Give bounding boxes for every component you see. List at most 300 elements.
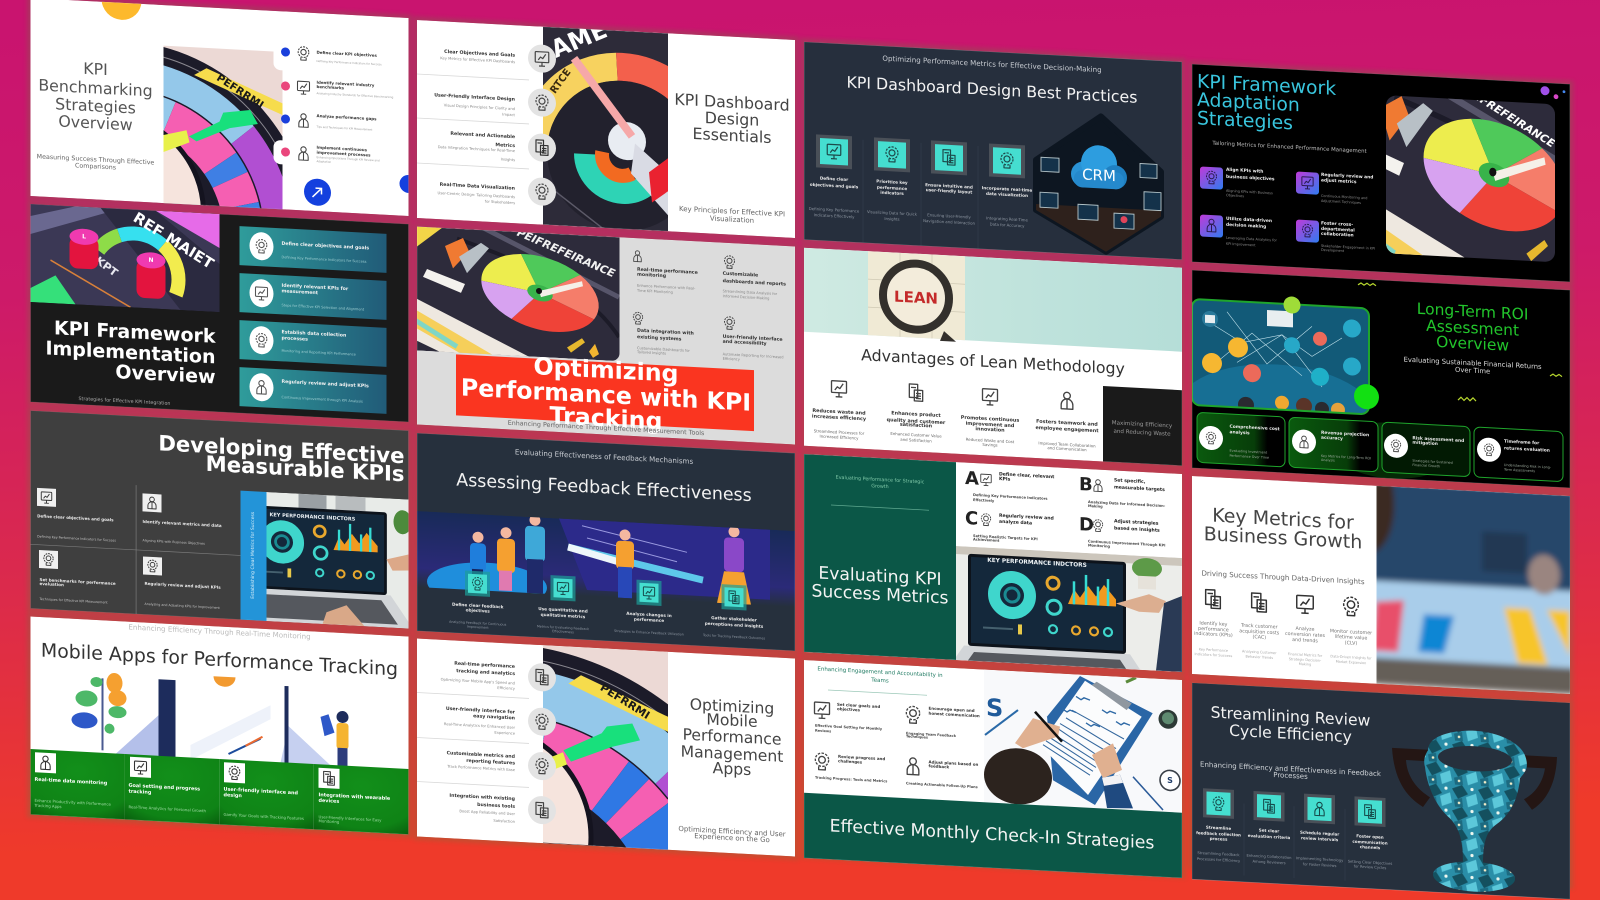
item: Identify relevant industry benchmarks: Analyzing Industry Standards for Effective Benchmarking — [316, 91, 394, 99]
item: Align KPIs with business objectives — [1200, 166, 1274, 198]
title: Measurable KPIs — [206, 451, 404, 487]
item: User-friendly interface and design: Gamify Your Goals with Tracking Features — [224, 812, 304, 821]
item: Promotes continuous improvement and innovation: Savings — [982, 441, 998, 447]
item: Prioritize key performance indicators: Insights — [884, 215, 900, 221]
item: Use quantitative and qualitative metrics: Effectiveness — [552, 629, 574, 634]
item: Data integration with existing systems: existing systems — [637, 334, 682, 342]
card: Risk assessment and mitigation: Strategies for Sustained — [1412, 459, 1453, 465]
item: Analyze conversion rates and trends: Making — [1299, 662, 1311, 667]
title: Tracking — [550, 401, 662, 435]
subtitle: Measuring Success Through Effective — [37, 153, 154, 166]
item: Utilize data-driven decision making: decision making — [1226, 221, 1266, 229]
item: Set clear evaluation criteria — [1246, 791, 1292, 866]
item: Streamline feedback collection process: process — [1210, 835, 1228, 841]
title: Assessment — [1426, 317, 1519, 340]
image: CRM cloud: CRM — [1082, 165, 1116, 185]
item: Implement continuous improvement processes: Implement continuous — [316, 144, 368, 152]
title: Success Metrics — [811, 581, 949, 609]
item: Use quantitative and qualitative metrics: Metrics for Evaluating Feedback — [537, 624, 589, 631]
item: Goal setting and progress tracking: tracking — [128, 789, 152, 796]
item: Ensure intuitive and user-friendly layout — [923, 140, 975, 225]
item: Real-time performance monitoring: Time KPI Monitoring — [636, 289, 673, 295]
item: Set clear goals and objectives — [814, 700, 883, 736]
image: laptop dashboard — [938, 545, 1182, 695]
item: Analyze conversion rates and trends: and trends — [1292, 637, 1318, 644]
item: Define clear feedback objectives: Improvement — [467, 625, 489, 630]
item: Monitor customer lifetime value: Monitor customer — [1330, 628, 1372, 636]
image: performance dial: PEFRRMI — [598, 681, 652, 722]
title: Apps — [713, 759, 751, 779]
subtitle: Optimizing Efficiency and User — [678, 825, 786, 839]
item: Gather stakeholder perceptions and insights: Tools for Tracking Feedback Outcomes — [702, 633, 765, 640]
item: Identify key performance indicators: Identify key — [1199, 620, 1228, 627]
item: Foster open communication channels — [1348, 796, 1392, 871]
item: Encourage open and honest communication: Engaging Team Feedback — [906, 731, 957, 738]
item: Implement continuous improvement processes: Enhancing Operations Through KPI Review and — [316, 155, 380, 163]
item: User-Friendly Interface Design: User-Friendly Interface Design — [434, 92, 515, 103]
item: Gather stakeholder perceptions and insights: perceptions and insights — [705, 620, 764, 628]
card: Define clear objectives and goals: Defining Key Performance Indicators for Success — [282, 255, 367, 264]
item: Set clear evaluation criteria: Enhancing Collaboration — [1246, 854, 1292, 860]
item: Analyze conversion rates and trends: Analyze — [1296, 625, 1314, 632]
item: Identify relevant metrics and data — [142, 493, 222, 547]
item: Identify relevant metrics and data: Aligning KPIs with Business Objectives — [142, 538, 205, 546]
subtitle: Visualization — [710, 215, 754, 225]
image: laptop dashboard: KEY PERFORMANCE INDCTORS — [987, 558, 1087, 569]
card: Comprehensive cost analysis: Comprehensive cost — [1230, 423, 1280, 432]
item: Foster cross-departmental collaboration: Foster cross- — [1321, 220, 1353, 228]
title: Benchmarking — [38, 75, 153, 100]
item: Track customer acquisition costs: Behavior Trends — [1246, 655, 1273, 660]
item: Enhances product quality and customer satisfaction: quality and customer — [887, 417, 946, 426]
item: Foster open communication channels: for Review Cycles — [1354, 864, 1386, 870]
image: signing a checklist: S — [986, 694, 1003, 723]
subtitle: Teams — [870, 678, 889, 684]
item: Adjust plans based on feedback: feedback — [928, 763, 949, 769]
item: Reduces waste and increases efficiency — [812, 380, 867, 441]
item: Ensure intuitive and user-friendly layout: Ensure intuitive and — [925, 182, 973, 189]
item A: KPIs — [999, 476, 1011, 482]
item: Encourage open and honest communication: Encourage open and — [928, 705, 975, 713]
image: KPI gauge with cylinders: N — [148, 257, 154, 264]
item: Analyze performance gaps — [281, 113, 376, 131]
item: Define clear objectives and goals — [809, 134, 860, 219]
item: Incorporate real-time data visualization — [982, 143, 1032, 228]
image: LEAN magnifier — [804, 248, 1182, 354]
item: Set clear evaluation criteria: Set clear — [1259, 827, 1279, 833]
item: Real-time performance monitoring — [634, 251, 698, 296]
item: Reduces waste and increases efficiency: Increased Efficiency — [820, 433, 859, 440]
item B: Analyzing Data for Informed Decision- — [1088, 500, 1166, 508]
item: Relevant and Actionable Metrics: Insights — [501, 157, 515, 162]
item: Ensure intuitive and user-friendly layout: Ensuring User-Friendly — [927, 212, 972, 219]
item: User-friendly interface and design: User-friendly interface and — [224, 787, 299, 797]
item: Regularly review and adjust metrics: adjust metrics — [1321, 177, 1357, 185]
item: Adjust plans based on feedback — [906, 758, 979, 789]
item: Goal setting and progress tracking — [125, 754, 219, 825]
sidebar — [804, 454, 956, 660]
item: Incorporate real-time data visualization: data visualization — [986, 190, 1028, 198]
list background tabs — [274, 52, 282, 164]
item: Promotes continuous improvement and innovation: Reduced Waste and Cost — [966, 436, 1015, 444]
item: Streamline feedback collection process: Streamline — [1206, 824, 1231, 830]
title banner — [456, 354, 754, 431]
item: Prioritize key performance indicators: Prioritize key — [876, 178, 908, 185]
item: Integration with wearable devices: User-Friendly Interfaces for Easy — [318, 814, 382, 822]
item: Align KPIs with business objectives: Align KPIs with — [1226, 166, 1263, 174]
item: Customizable metrics and reporting features: Customizable metrics and — [447, 750, 515, 759]
subtitle: Key Principles for Effective KPI — [679, 205, 785, 219]
callout box: and Reducing Waste — [1113, 429, 1171, 438]
title: Strategies — [55, 94, 136, 117]
illustration: plant, charts and person — [72, 669, 348, 769]
item: Identify key performance indicators: indicators (KPIs) — [1194, 630, 1233, 638]
vertical label bar — [240, 491, 266, 621]
item: User-friendly interface and accessibility: Efficiency — [723, 357, 741, 362]
panel: KPI Benchmarking Strategies Overview — [30, 0, 408, 216]
panel: KPI Framework Implementation Overview — [30, 203, 408, 422]
title: Adaptation — [1197, 89, 1300, 116]
item: Analyze changes in performance: Strategies to Enhance Feedback Utilization — [614, 629, 684, 637]
item: Integration with wearable devices: Integration with wearable — [318, 792, 391, 802]
image: LEAN magnifier: LEAN — [894, 287, 938, 308]
item: Schedule regular review intervals — [1296, 793, 1344, 868]
item: Integration with existing business tools: business tools — [477, 801, 515, 809]
item: Identify relevant metrics and data: Identify relevant metrics and data — [142, 519, 222, 528]
item: Goal setting and progress tracking: Real-Time Analytics for Personal Growth — [128, 804, 207, 813]
item: Integration with existing business tools: Integration with existing — [449, 792, 515, 802]
subtitle: Experience on the Go — [694, 832, 770, 844]
subtitle: Strategies for Effective KPI Integration — [79, 396, 170, 407]
item: Define clear objectives and goals: Indicators Effectively — [814, 212, 855, 219]
item: Identify relevant industry benchmarks: Identify relevant industry — [316, 79, 375, 87]
image: crystal trophy — [1392, 726, 1557, 896]
item: Data integration with existing systems: Data integration with — [637, 327, 694, 336]
item: Review progress and challenges: challenges — [838, 758, 863, 764]
item: Define clear objectives and goals — [37, 488, 116, 543]
item: Prioritize key performance indicators: performance — [877, 184, 907, 191]
card: Risk assessment and mitigation: Financial Growth — [1412, 463, 1440, 468]
item: Review progress and challenges — [815, 752, 887, 783]
panel: Advantages of Lean Methodology — [804, 248, 1182, 466]
title: Performance with KPI — [461, 373, 751, 417]
item B: Set specific, — [1114, 477, 1146, 485]
item D: D — [1079, 514, 1094, 536]
item: Fosters teamwork and employee engagement: Fosters teamwork and — [1036, 419, 1098, 428]
item: Ensure intuitive and user-friendly layout: user-friendly layout — [926, 187, 972, 194]
item: Real-Time Data Visualization: User-Centric Design: Tailoring Dashboards — [438, 191, 515, 199]
item: Promotes continuous improvement and innovation: Promotes continuous — [961, 415, 1019, 424]
item: Regularly review and adjust metrics: Adjustment Techniques — [1321, 199, 1361, 205]
card: Comprehensive cost analysis: Performance Over Time — [1230, 454, 1269, 460]
item: Set clear goals and objectives: Set clear goals and — [837, 701, 880, 709]
item: Fosters teamwork and employee engagement: and Communication — [1047, 445, 1087, 452]
item: Enhances product quality and customer satisfaction: satisfaction — [900, 422, 933, 430]
item: Promotes continuous improvement and innovation — [961, 388, 1019, 448]
icon: arrow button — [304, 178, 331, 206]
item: Use quantitative and qualitative metrics: qualitative metrics — [541, 611, 586, 619]
item: User-Friendly Interface Design: Impact — [502, 113, 516, 117]
card: Regularly review and adjust KPIs: Continuous Improvement through KPI Analysis — [282, 395, 363, 404]
title: KPI Dashboard — [674, 89, 790, 114]
item: Encourage open and honest communication — [906, 704, 980, 742]
item: Enhances product quality and customer satisfaction — [887, 383, 946, 444]
item: Foster open communication channels: Setting Clear Objectives — [1348, 860, 1392, 866]
card: Define clear objectives and goals: Define clear objectives and goals — [282, 241, 369, 251]
item: Foster open communication channels: communication — [1352, 838, 1388, 845]
item: User-friendly interface for easy navigation — [444, 703, 556, 738]
item: Real-time data monitoring: Tracking Apps — [34, 802, 62, 809]
item D: based on insights — [1114, 525, 1160, 533]
card: Risk assessment and mitigation: Risk assessment and — [1412, 435, 1464, 444]
item: Use quantitative and qualitative metrics: Use quantitative and — [538, 606, 588, 613]
title: Cycle Efficiency — [1229, 722, 1352, 746]
item: Analyze changes in performance — [614, 578, 684, 637]
item: Goal setting and progress tracking: Goal setting and progress — [128, 783, 200, 792]
item: Streamline feedback collection process: Processes for Efficiency — [1197, 857, 1241, 863]
item: Schedule regular review intervals: Schedule regular — [1300, 829, 1339, 836]
card: Timeframe for returns evaluation: Understanding Risk in Long- — [1504, 463, 1552, 470]
image: performance gauge: PEIFREFEIRANCE — [1461, 83, 1558, 151]
image: blurred business chart — [1372, 481, 1577, 694]
item: Enhances product quality and customer satisfaction: and Satisfaction — [900, 436, 932, 443]
card: Regularly review and adjust KPIs — [240, 367, 386, 414]
item D: Continuous Improvement Through KPI — [1088, 539, 1165, 548]
item A: Defining Key Performance Indicators — [973, 493, 1048, 501]
subtitle: Driving Success Through Data-Driven Insights — [1201, 569, 1365, 586]
image: performance dial: PEFRRMI — [214, 72, 266, 111]
title: Developing Effective — [158, 431, 404, 469]
item: Track customer acquisition costs: acquisition costs — [1239, 628, 1280, 636]
image: laptop dashboard — [214, 489, 414, 631]
title: Overview — [58, 111, 133, 134]
image: performance gauge — [407, 220, 620, 377]
item: Real-time data monitoring: Enhance Productivity with Performance — [34, 797, 112, 806]
title: KPI Framework — [1197, 71, 1336, 99]
panel: Streamlining Review Cycle Efficiency — [1192, 683, 1570, 899]
item: Implement continuous improvement processes: improvement processes — [316, 149, 371, 157]
item: Analyze conversion rates and trends: Financial Metrics for — [1288, 652, 1323, 658]
image: dashboard gauge — [543, 26, 668, 232]
item: Align KPIs with business objectives: business objectives — [1226, 173, 1275, 182]
item: Customizable dashboards and reports: dashboards and reports — [723, 278, 786, 287]
item: Set clear goals and objectives: Reviews — [815, 729, 831, 733]
item: Define clear objectives and goals: Define clear objectives and goals — [37, 513, 114, 522]
item: Analyze performance gaps: Tips and Techniques for KPI Measurement — [316, 125, 372, 132]
item: Promotes continuous improvement and innovation: improvement and — [966, 421, 1015, 429]
item C: analyze data — [999, 518, 1032, 526]
title: KPI Dashboard Design Best Practices — [847, 72, 1137, 107]
item: Real-time data monitoring: Real-time data monitoring — [34, 777, 108, 787]
card: Identify relevant KPIs for measurement: Steps for Effective KPI Selection and Alignment — [282, 303, 365, 312]
item: User-friendly interface for easy navigation: User-friendly interface for — [446, 705, 516, 715]
item: Reduces waste and increases efficiency: increases efficiency — [812, 414, 867, 422]
item: Incorporate real-time data visualization: Data for Accuracy — [990, 221, 1025, 228]
signing hand and pen — [984, 709, 1133, 810]
item: Implement continuous improvement processes: Adaptation — [316, 159, 331, 164]
item: Reduces waste and increases efficiency: Streamlined Processes for — [814, 428, 865, 435]
item: Relevant and Actionable Metrics — [438, 131, 556, 162]
subtitle: Evaluating Effectiveness of Feedback Mechanisms — [515, 447, 693, 466]
card: Establish data collection processes: Monitoring and Reporting KPI Performance — [282, 349, 356, 357]
image: KPI gauge with cylinders: REF MAIET — [130, 209, 218, 273]
title: Long-Term ROI — [1417, 300, 1528, 324]
card: Establish data collection processes: processes — [282, 335, 308, 342]
item: Relevant and Actionable Metrics: Relevant and Actionable — [450, 130, 515, 140]
item: Align KPIs with business objectives: Objectives — [1226, 193, 1244, 198]
item B — [1079, 474, 1166, 512]
card: Comprehensive cost analysis: Evaluating Investment — [1230, 449, 1268, 455]
title: Implementation — [45, 337, 215, 368]
item: Integration with existing business tools — [449, 791, 556, 826]
item: Analyze conversion rates and trends: conversion rates — [1285, 630, 1325, 639]
item: Adjust plans based on feedback: Creating Actionable Follow-Up Plans — [906, 781, 978, 789]
item: User-friendly interface and design: design — [224, 792, 242, 799]
item: User-friendly interface and accessibility: User-friendly interface — [723, 333, 783, 342]
item: Real-time performance tracking and analytics: tracking and analytics — [456, 668, 515, 677]
title: Performance — [683, 726, 781, 749]
subtitle: Growth — [871, 483, 889, 490]
item: Review progress and challenges: Review progress and — [838, 753, 885, 761]
item: Real-time performance tracking and analytics: Efficiency — [497, 686, 516, 691]
panel: Effective Monthly Check-In Strategies — [804, 660, 1182, 879]
image: CRM cloud — [1036, 113, 1161, 255]
card: Revenue projection accuracy: Analysis — [1321, 458, 1335, 463]
card: Revenue projection accuracy — [1289, 417, 1378, 472]
image: laptop dashboard: KEY PERFORMANCE INDCTORS — [270, 512, 356, 523]
item: Utilize data-driven decision making — [1200, 214, 1278, 249]
image: signing a checklist — [984, 670, 1182, 813]
item: Utilize data-driven decision making: Leveraging Data Analytics for — [1226, 236, 1278, 243]
item: Foster cross-departmental collaboration: departmental — [1321, 225, 1355, 233]
vertical label bar: Establishing Clear Metrics for Success — [250, 511, 256, 599]
item: Integration with wearable devices — [314, 764, 408, 835]
item: Foster open communication channels: channels — [1360, 844, 1381, 850]
item: Set clear goals and objectives: Effective Goal Setting for Monthly — [815, 724, 883, 731]
item: Real-time performance monitoring: Real-time performance — [637, 266, 698, 275]
image: dashboard gauge: RTCE — [548, 67, 574, 96]
image: KPI gauge with cylinders: KPT — [93, 254, 120, 280]
panel: KPI Framework Adaptation Strategies — [1192, 64, 1570, 282]
item: Ensure intuitive and user-friendly layout: Navigation and Interaction — [923, 218, 975, 225]
clipboard — [1040, 674, 1153, 808]
panel: KPI Dashboard Design Best Practices — [804, 42, 1182, 260]
item: Schedule regular review intervals: Implementing Technology — [1296, 856, 1344, 863]
title: Mobile Apps for Performance Tracking — [41, 640, 398, 680]
item: Clear Objectives and Goals: Key Metrics for Effective KPI Dashboards — [440, 56, 515, 64]
item A: Define clear, relevant — [999, 471, 1055, 480]
item: Streamline feedback collection process: Streamlining Feedback — [1197, 851, 1240, 857]
item: Define clear feedback objectives — [449, 570, 507, 631]
image: dashboard gauge: AME — [546, 16, 612, 64]
item: Foster cross-departmental collaboration: Development — [1321, 248, 1345, 253]
image: performance dial — [503, 643, 733, 879]
image: performance gauge: PEIFREFEIRANCE — [515, 226, 617, 280]
title: KPI — [83, 58, 108, 79]
subtitle: Enhancing Efficiency and Effectiveness in Feedback — [1200, 761, 1382, 778]
item: Regularly review and adjust KPIs — [143, 556, 221, 610]
item B: B — [1079, 474, 1093, 496]
item: User-friendly interface for easy navigation: Experience — [494, 731, 516, 736]
image: performance gauge — [1386, 96, 1555, 262]
item: Fosters teamwork and employee engagement: Improved Team Collaboration — [1038, 440, 1096, 448]
title: Streamlining Review — [1211, 703, 1371, 730]
item: Utilize data-driven decision making: Utilize data-driven — [1226, 215, 1272, 224]
item: Align KPIs with business objectives: Aligning KPIs with Business — [1226, 189, 1273, 195]
item C: C — [965, 508, 978, 530]
item: User-friendly interface and accessibility: Automate Reporting for Increased — [723, 352, 784, 359]
item: Define clear KPI objectives — [281, 46, 382, 66]
item: Relevant and Actionable Metrics: Metrics — [495, 142, 515, 149]
callout box: Maximizing Efficiency — [1112, 420, 1173, 430]
item: Customizable dashboards and reports: Informed Decision-Making — [723, 294, 769, 301]
item: Incorporate real-time data visualization: Incorporate real-time — [982, 185, 1032, 192]
subtitle: Enhancing Performance Through Effective Measurement Tools — [508, 420, 704, 437]
item A: A — [965, 468, 979, 490]
item: Customizable metrics and reporting features — [446, 747, 556, 781]
title: Business Growth — [1204, 523, 1362, 554]
title: Optimizing — [690, 695, 774, 718]
item: Real-time performance tracking and analytics: Real-time performance — [454, 660, 515, 669]
item: Real-time performance tracking and analytics: Optimizing Your Mobile App's Speed and — [441, 678, 515, 685]
item: Prioritize key performance indicators: indicators — [880, 189, 904, 196]
item B: Making — [1088, 504, 1103, 509]
item: Clear Objectives and Goals — [440, 44, 556, 73]
card: Identify relevant KPIs for measurement — [240, 273, 386, 320]
image: signing a checklist: S — [1167, 776, 1173, 785]
panel: Long-Term ROI Assessment Overview — [1177, 269, 1570, 488]
image: performance dial — [164, 46, 282, 210]
card: Risk assessment and mitigation: mitigation — [1412, 439, 1438, 447]
item: User-friendly interface and accessibility: and accessibility — [723, 338, 767, 347]
item: Schedule regular review intervals: review intervals — [1301, 835, 1339, 842]
card: Comprehensive cost analysis: analysis — [1230, 429, 1250, 436]
item: User-friendly interface for easy navigation: easy navigation — [473, 713, 515, 721]
item: Identify relevant industry benchmarks — [281, 80, 394, 99]
item: Adjust plans based on feedback: Adjust plans based on — [928, 759, 979, 766]
panel: Key Metrics for Business Growth — [1192, 471, 1577, 694]
item: Analyze changes in performance: Analyze changes in — [626, 610, 672, 618]
item: Track customer acquisition costs: Analyzing Customer — [1242, 649, 1277, 655]
title: Overview — [115, 361, 215, 388]
card: Identify relevant KPIs for measurement: measurement — [282, 288, 319, 296]
item: Regularly review and adjust KPIs: Analyzing and Adjusting KPIs for Improvement — [144, 602, 221, 610]
panel: Optimizing Performance with KPI Tracking — [407, 220, 795, 445]
item: Identify key performance indicators: Key Performance — [1199, 647, 1228, 653]
item: Integration with existing business tools: Boost App Reliability and User — [459, 809, 515, 816]
item: Define clear objectives and goals: objectives and goals — [810, 181, 859, 189]
item A — [965, 468, 1055, 506]
item: Customizable dashboards and reports: Customizable — [723, 270, 758, 278]
item: Clear Objectives and Goals: Clear Objectives and Goals — [444, 49, 515, 59]
item: Monitor customer lifetime value — [1330, 596, 1372, 666]
item: Monitor customer lifetime value: (CLV) — [1345, 640, 1357, 646]
item: Gather stakeholder perceptions and insights: Gather stakeholder — [711, 615, 758, 622]
item: Prioritize key performance indicators — [867, 137, 918, 222]
item: Streamline feedback collection process — [1196, 788, 1241, 863]
item C: Setting Realistic Targets for KPI — [973, 534, 1038, 541]
item: Fosters teamwork and employee engagement — [1035, 391, 1099, 452]
item: Reduces waste and increases efficiency: Reduces waste and — [812, 408, 866, 417]
title: Key Metrics for — [1212, 505, 1354, 534]
item: Review progress and challenges: Tracking Progress: Tools and Metrics — [815, 776, 887, 783]
subtitle: Enhancing Efficiency Through Real-Time Monitoring — [128, 622, 311, 641]
item: Data integration with existing systems: Customizable Dashboards for — [637, 346, 690, 353]
item: Real-Time Data Visualization — [438, 178, 556, 206]
card: Timeframe for returns evaluation — [1474, 427, 1563, 482]
card: Revenue projection accuracy: Key Metrics for Long-Term ROI — [1321, 454, 1371, 460]
item: Set clear goals and objectives: objectives — [837, 706, 861, 712]
